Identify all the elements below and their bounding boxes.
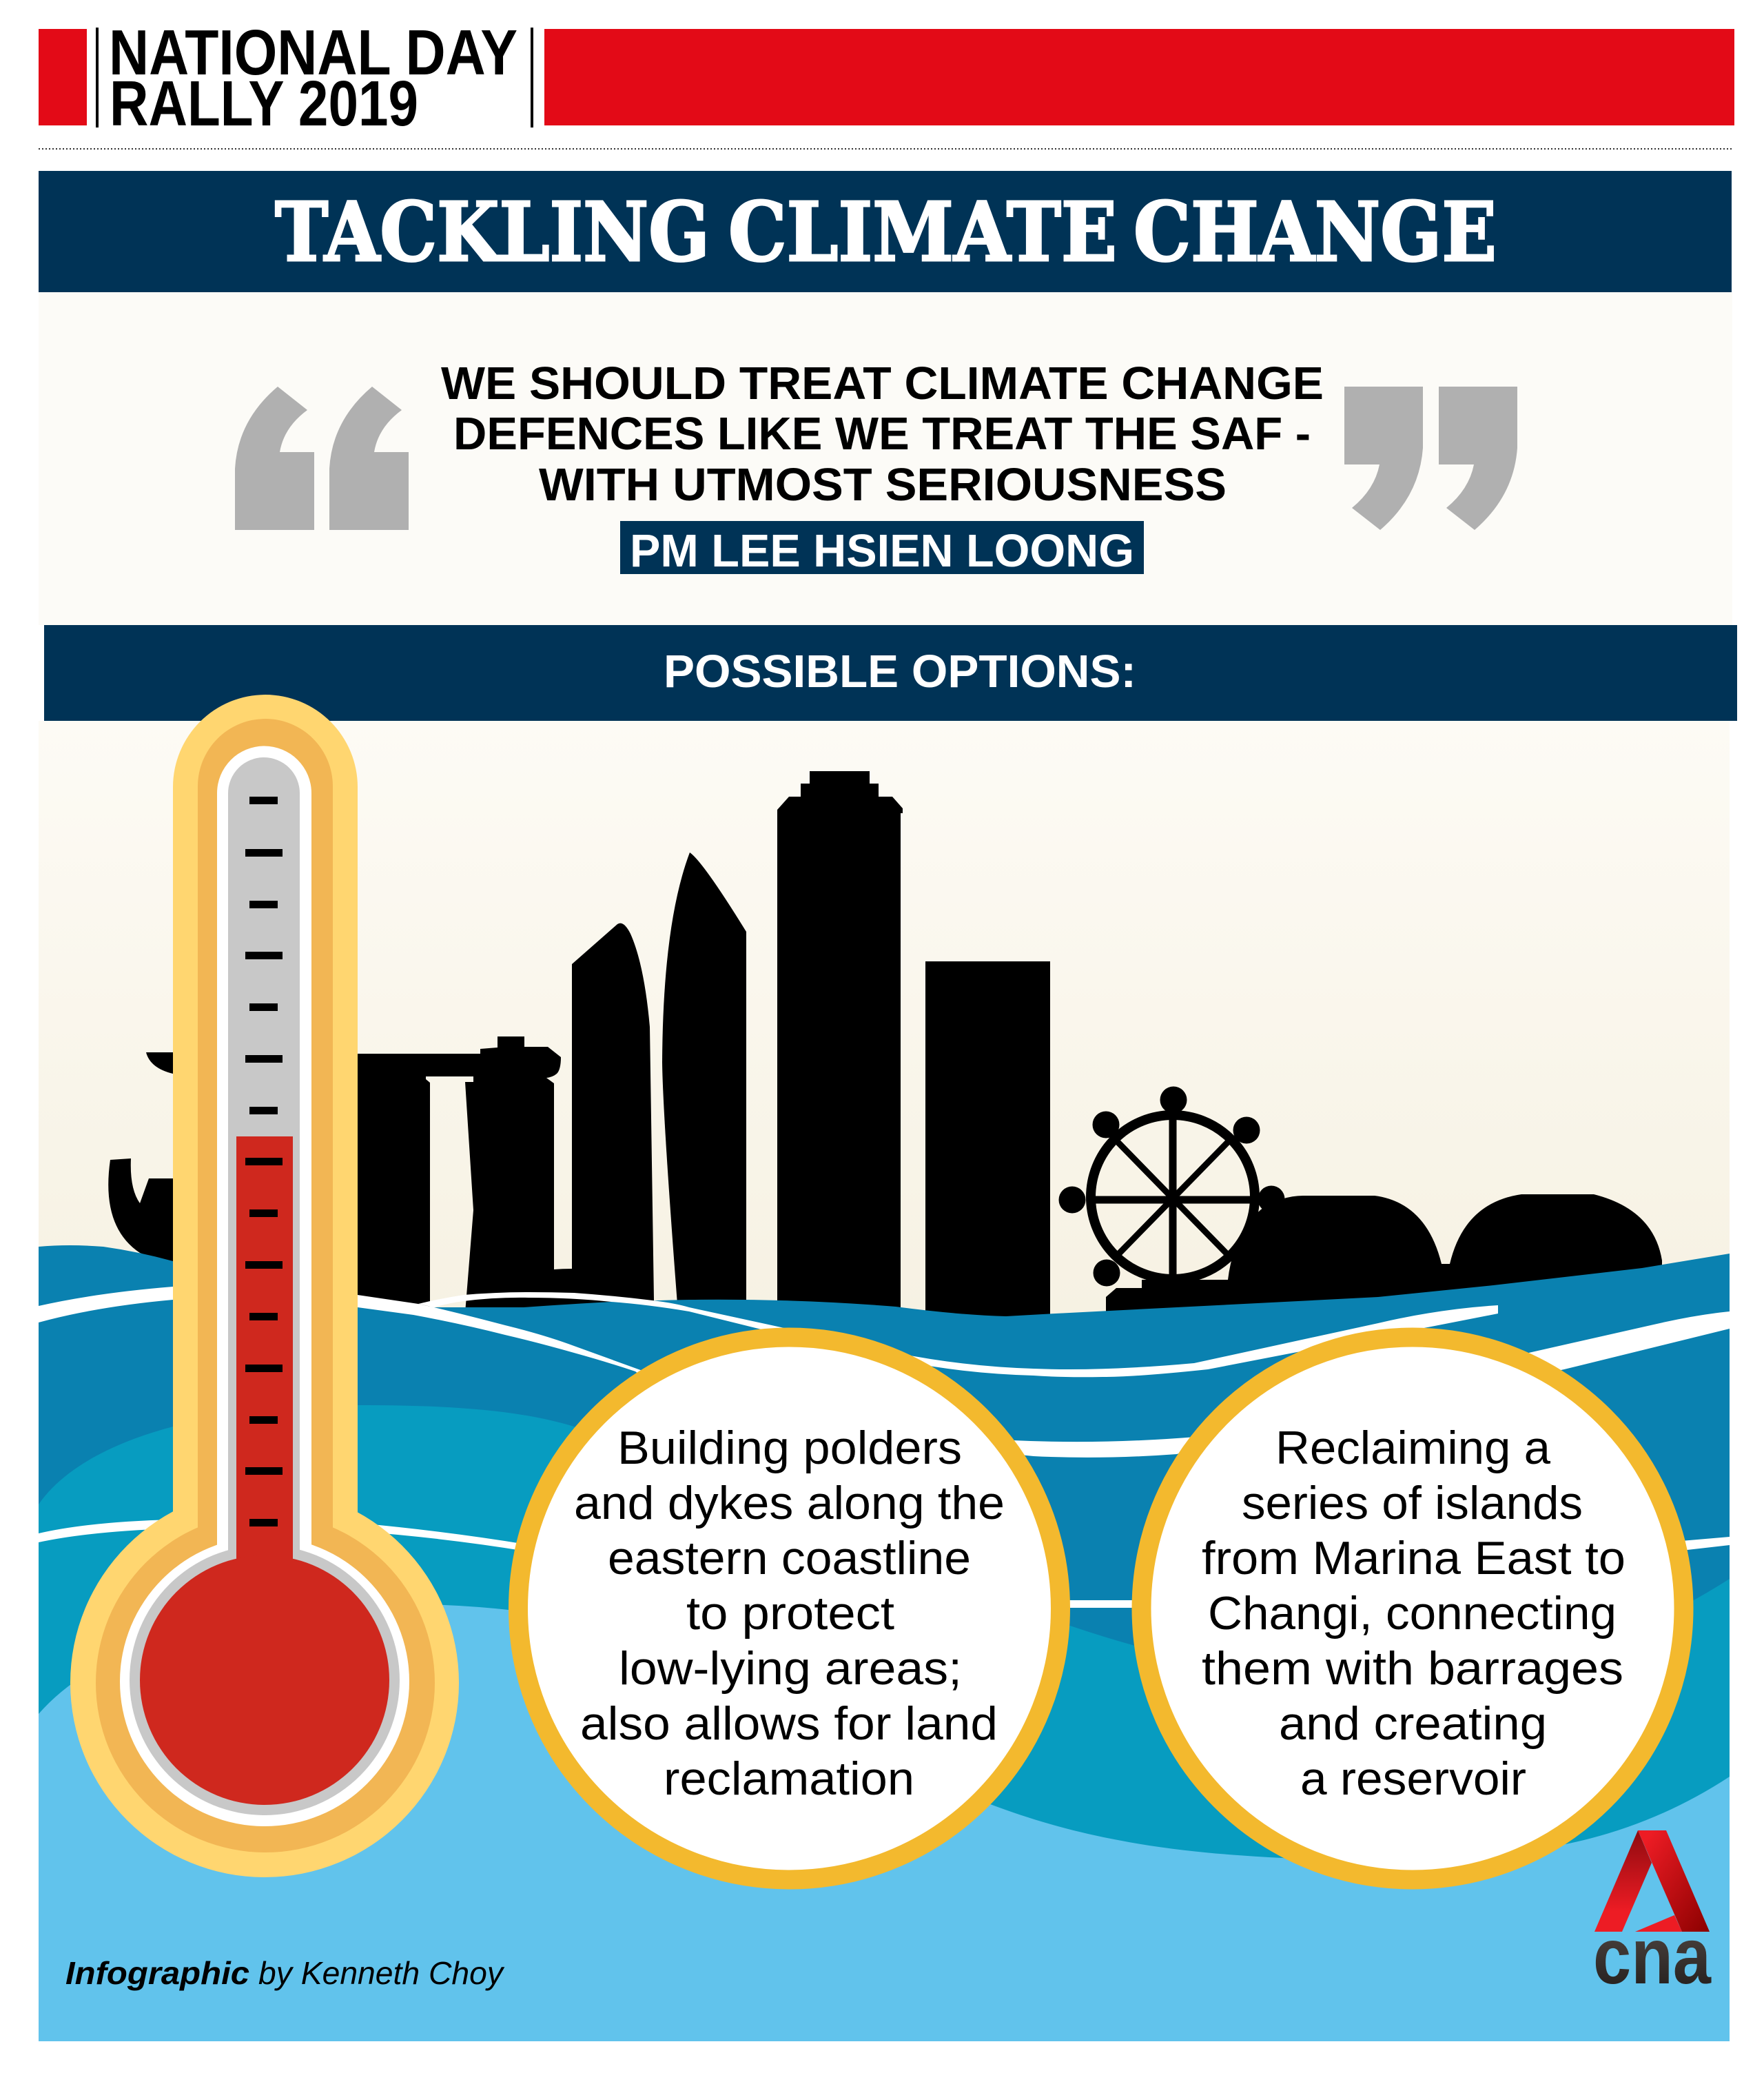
quote text: WE SHOULD TREAT CLIMATE CHANGE <box>441 358 1324 409</box>
callout text: low-lying areas; <box>619 1642 962 1695</box>
title: CLIMATE <box>728 184 1117 280</box>
icon: opening quotation mark <box>235 387 409 530</box>
header: National Day Rally 2019 <box>39 17 1734 139</box>
sail tower <box>662 852 746 1313</box>
merlion <box>108 1052 179 1268</box>
title banner <box>39 171 1732 292</box>
options banner <box>44 625 1737 721</box>
quote text <box>441 358 1324 511</box>
title <box>275 184 1497 280</box>
panel: scene sky <box>39 721 1730 1344</box>
light blue wave <box>39 1604 1730 2041</box>
stepped tower <box>777 771 903 1316</box>
scale ticks <box>245 797 283 1526</box>
callout text: and creating <box>1279 1697 1547 1750</box>
callout: polders and dykes <box>518 1337 1060 1880</box>
icon: closing quotation mark <box>1344 387 1517 530</box>
waves <box>39 1245 1730 2041</box>
callout text <box>1202 1422 1625 1805</box>
callout text: also allows for land <box>580 1697 998 1750</box>
white wave bands lower <box>39 1520 1730 1608</box>
gardens domes <box>1106 1194 1662 1323</box>
logo: cna: cna <box>1593 1912 1712 2001</box>
ferris wheel <box>1058 1086 1284 1286</box>
quote attribution: PM LEE HSIEN LOONG <box>630 525 1134 577</box>
callout text: them with barrages <box>1202 1642 1623 1695</box>
callout text: reclamation <box>664 1753 914 1805</box>
header label: NATIONAL DAY <box>109 17 517 88</box>
thermometer <box>70 695 459 1877</box>
white wave bands upper <box>39 1287 1730 1458</box>
dark blue wave <box>39 1245 1730 1723</box>
teal wave <box>39 1405 1730 1874</box>
callout text: eastern coastline <box>608 1532 971 1584</box>
logo: cna <box>1593 1830 1712 2001</box>
header label: RALLY 2019 <box>110 68 418 139</box>
block tower <box>925 961 1050 1320</box>
options heading: POSSIBLE OPTIONS: <box>664 646 1136 697</box>
credit: Infographic <box>65 1955 249 1991</box>
callout text: to protect <box>686 1587 894 1639</box>
header label <box>109 17 517 139</box>
callout text: and dykes along the <box>574 1477 1005 1529</box>
title: CHANGE <box>1134 184 1497 280</box>
callout: reclaiming islands <box>1141 1337 1684 1880</box>
callout text <box>574 1422 1005 1805</box>
marina bay sands and curved tower <box>351 923 654 1313</box>
panel: quote <box>39 292 1732 625</box>
callout text: Building polders <box>617 1422 962 1474</box>
callout text: Reclaiming a <box>1275 1422 1550 1474</box>
credit: by Kenneth Choy <box>258 1955 505 1991</box>
callout text: Changi, connecting <box>1208 1587 1617 1639</box>
skyline silhouette <box>108 771 1662 1323</box>
callout text: from Marina East to <box>1202 1532 1625 1584</box>
callout text: a reservoir <box>1300 1753 1526 1805</box>
callout text: series of islands <box>1242 1477 1583 1529</box>
mercury <box>140 1136 389 1805</box>
quote text: WITH UTMOST SERIOUSNESS <box>539 459 1227 511</box>
quote text: DEFENCES LIKE WE TREAT THE SAF - <box>453 408 1311 460</box>
title: TACKLING <box>275 184 710 280</box>
